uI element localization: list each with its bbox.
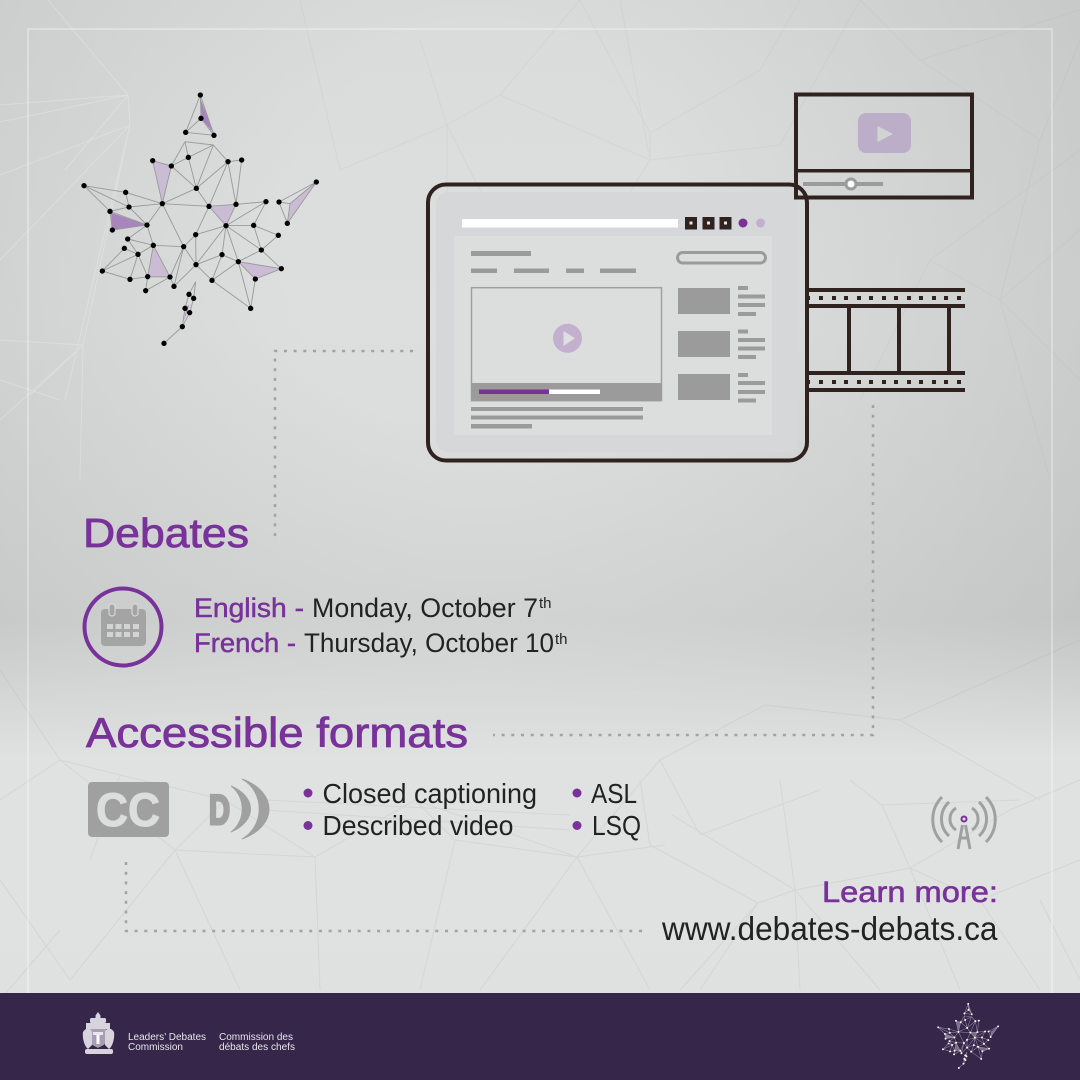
maple leaf network icon [81, 92, 319, 346]
icon: coat of arms [83, 1012, 114, 1054]
learn more: Learn more: [822, 876, 998, 909]
learn more [661, 876, 998, 947]
icon: film strip [808, 288, 965, 392]
icon: broadcast tower [933, 797, 995, 849]
footer bar [0, 993, 1080, 1080]
tablet mockup [428, 184, 807, 460]
address bar [462, 217, 765, 230]
debate dates: th [539, 595, 552, 612]
learn more: www.debates-debats.ca [661, 910, 998, 947]
main video [471, 288, 662, 401]
debate dates: English - [194, 593, 304, 623]
logo text: Commission des [219, 1032, 293, 1043]
debate dates: th [555, 631, 568, 648]
icon: described video: D [209, 786, 230, 833]
connector: formats to website [126, 862, 643, 931]
heading: Debates: Debates [83, 510, 249, 556]
thumbnail list [678, 286, 765, 402]
debate dates: Thursday, October 10 [304, 628, 554, 658]
logo text [128, 1032, 295, 1053]
debate dates [194, 593, 568, 658]
accessible formats list: ASL [591, 778, 637, 809]
logo text: Commission [128, 1042, 183, 1053]
description lines [471, 407, 643, 428]
connector: leaf to debates [275, 351, 413, 537]
logo text: débats des chefs [219, 1042, 295, 1053]
icon: described video [209, 779, 269, 839]
page header lines [471, 251, 766, 273]
accessible formats list: LSQ [592, 810, 641, 841]
icon: small maple leaf [937, 1003, 999, 1069]
accessible formats list [304, 778, 641, 841]
logo text: Leaders’ Debates [128, 1032, 206, 1043]
accessible formats list: Described video [322, 810, 514, 841]
connector: film to accessible formats [493, 405, 873, 735]
icon: video player window [796, 94, 972, 198]
accessible formats list: Closed captioning [322, 778, 537, 809]
icon: closed captioning: CC [96, 783, 160, 836]
debate dates: French - [194, 628, 296, 658]
heading: Accessible formats: Accessible formats [86, 709, 468, 756]
debate dates: Monday, October 7 [312, 593, 538, 623]
icon: calendar in circle [84, 588, 162, 666]
